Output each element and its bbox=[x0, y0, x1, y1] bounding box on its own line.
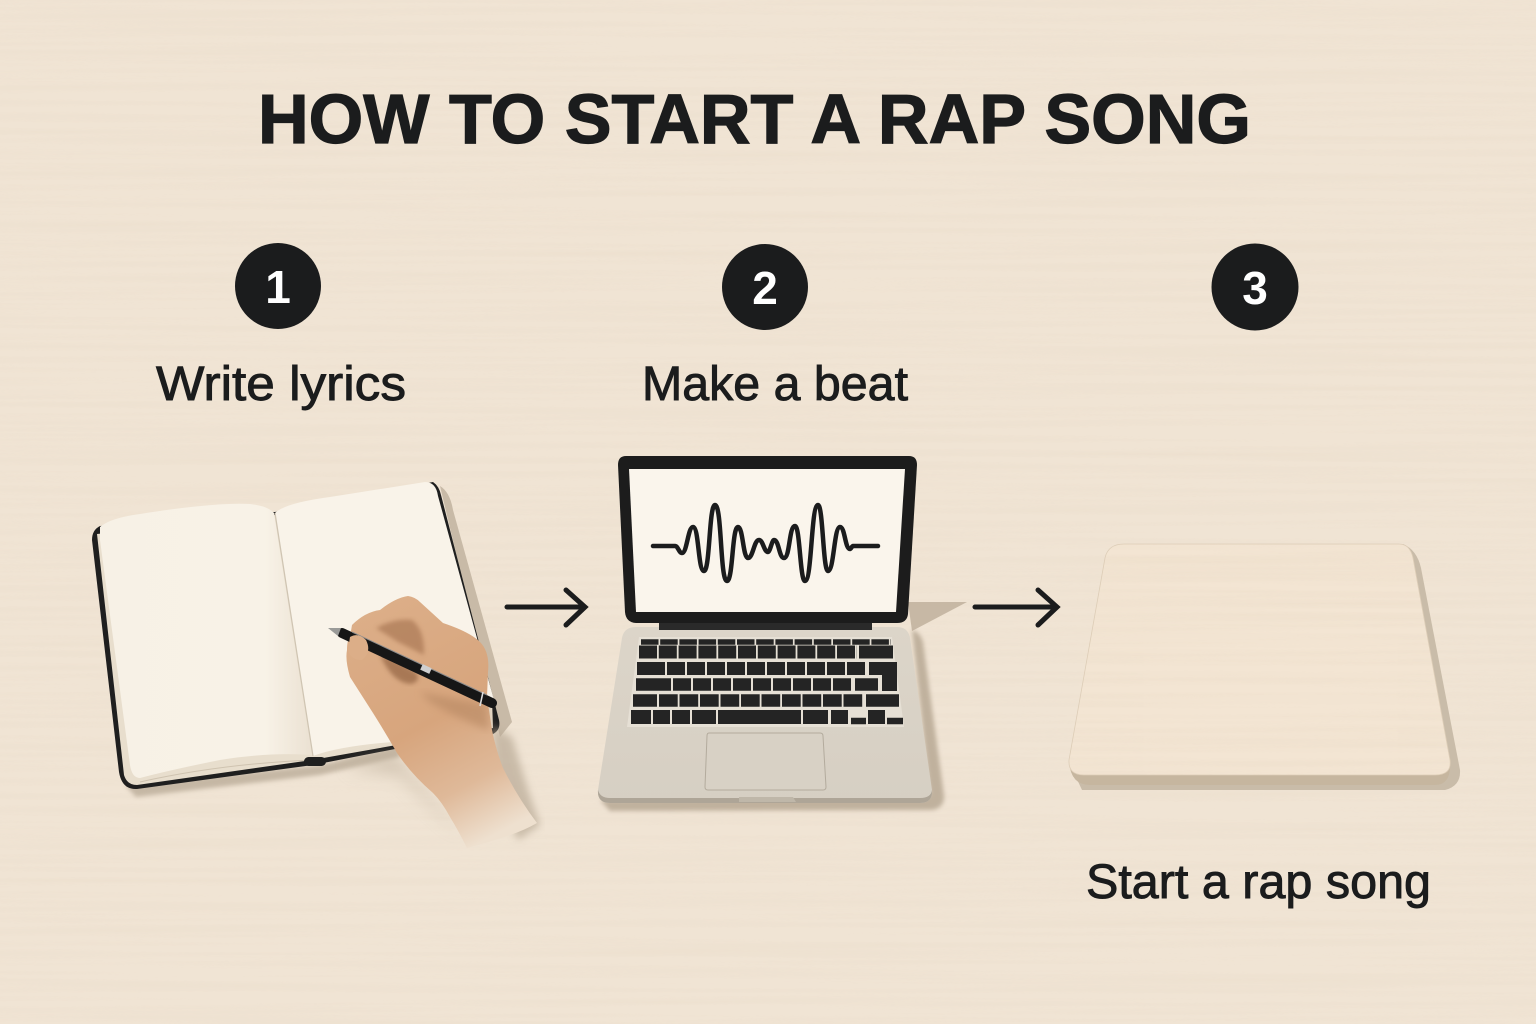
step 1 badge bbox=[235, 243, 321, 329]
label: make a beat: Make a beat bbox=[642, 358, 908, 411]
screen bbox=[629, 469, 905, 612]
fingertip bbox=[348, 635, 368, 660]
label: start a rap song: Start a rap song bbox=[1086, 856, 1431, 909]
illustration: hand with pen bbox=[328, 596, 540, 848]
illustration: blank wooden board bbox=[1060, 540, 1460, 790]
laptop shadow bbox=[908, 602, 967, 631]
laptop lid bbox=[618, 456, 917, 623]
step 3 badge: 3 bbox=[1242, 262, 1268, 314]
hand bbox=[346, 596, 537, 848]
notebook cover bbox=[92, 482, 499, 789]
board top bbox=[1069, 544, 1450, 775]
finger shadows bbox=[376, 620, 424, 655]
arrow 1 bbox=[507, 590, 585, 625]
illustration: laptop bbox=[598, 456, 967, 811]
left page bbox=[100, 504, 312, 778]
trackpad bbox=[705, 733, 826, 790]
illustration: notebook bbox=[92, 482, 512, 797]
step 3 badge bbox=[1212, 244, 1298, 330]
board shadow bbox=[1075, 544, 1460, 790]
right page bbox=[275, 482, 494, 756]
label: write lyrics: Write lyrics bbox=[156, 358, 406, 411]
step 2 badge bbox=[722, 244, 808, 330]
hinge bbox=[659, 622, 872, 630]
keyboard bbox=[627, 637, 904, 727]
arrow 2 bbox=[975, 590, 1057, 625]
step 2 badge: 2 bbox=[752, 262, 778, 314]
band clasp bbox=[304, 757, 326, 766]
step 1 badge: 1 bbox=[265, 261, 291, 313]
waveform bbox=[653, 505, 878, 581]
title: HOW TO START A RAP SONG bbox=[258, 80, 1251, 158]
pen bbox=[342, 633, 492, 703]
board edge bbox=[1069, 760, 1450, 785]
laptop base bbox=[598, 627, 932, 803]
